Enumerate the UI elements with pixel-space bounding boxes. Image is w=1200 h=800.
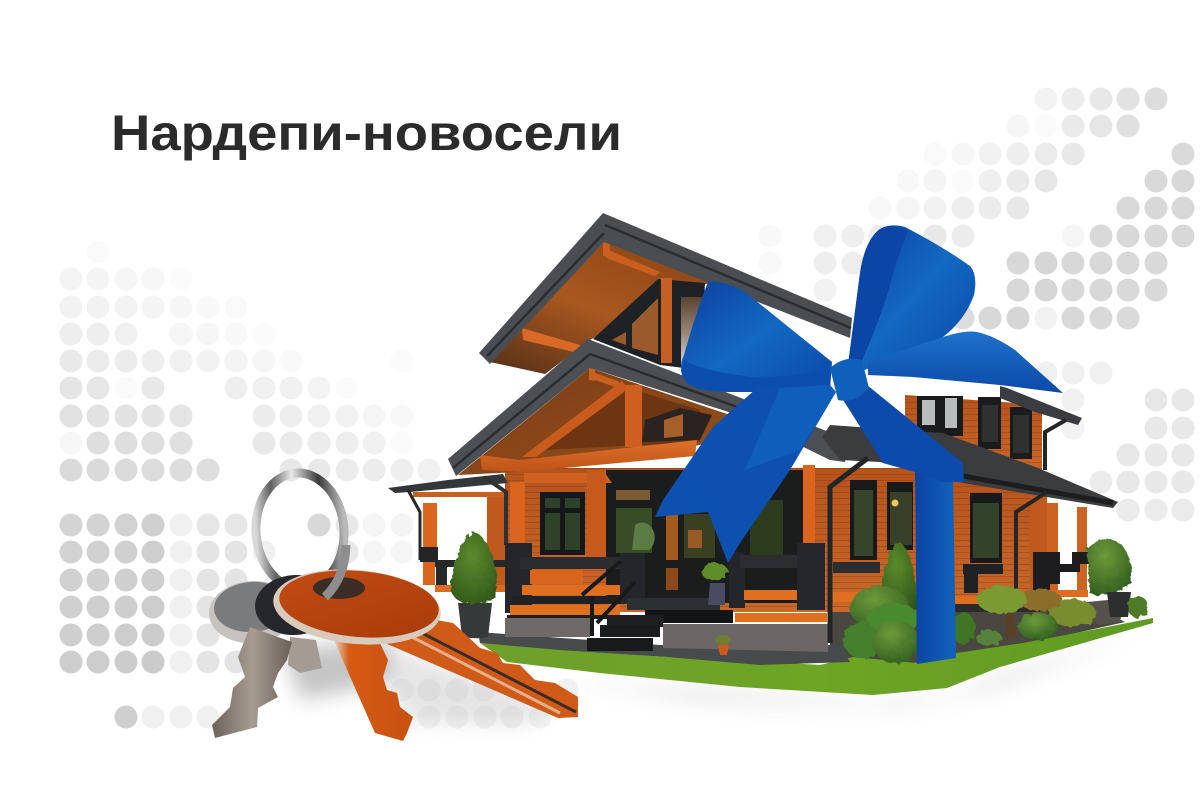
orange panel [530,570,583,584]
step 1 [587,638,653,651]
ring front arc [325,545,346,597]
left rail [435,560,506,585]
silver key blade [212,627,292,738]
window 1 [850,480,877,560]
granite foundation left [505,618,590,637]
left veranda post [423,503,437,547]
right rail strip [963,564,1003,593]
veranda post 2 [1077,507,1087,595]
black strip [512,596,622,604]
veranda back wall [1030,495,1047,600]
step 2 [600,625,660,637]
long key highlight [412,637,560,713]
shrub cluster [843,586,920,663]
glass [632,298,658,355]
small right shrub [1128,596,1148,618]
pier [505,543,532,613]
right window [970,493,1002,563]
black band [420,547,438,562]
veranda post 1 [1047,503,1058,600]
porch deck [627,598,720,610]
title: Нардепи-новосели [111,105,622,161]
pier [729,552,745,608]
orange key head [276,564,442,644]
dot pattern: upper left [60,240,440,482]
large right shrub [1087,539,1132,595]
front shrub [872,621,920,663]
wall base strip [950,604,1040,612]
long key groove [420,632,576,712]
black rail caps [1033,552,1092,592]
lower right tail [840,385,964,482]
shrub [451,532,498,604]
vase [708,583,725,605]
back key blade [288,637,322,673]
left window [540,492,585,555]
granite foundation right [663,624,828,652]
lower gable soffit [458,368,745,475]
plant [715,635,731,645]
orange key head rim [270,563,444,651]
downpipe left [484,477,506,545]
key hole [313,577,365,599]
orange panel [744,590,797,600]
base strip [507,615,620,619]
white opening at left veranda [437,503,505,550]
black planter right [1107,592,1131,617]
window c [1010,407,1032,459]
left loop underside [682,360,830,392]
ochre shrub [1048,599,1096,627]
post [803,465,815,543]
foliage [702,563,728,581]
siding column [661,278,672,363]
window a [917,396,963,436]
left pier and rail [505,543,626,619]
key ring [252,470,348,592]
right veranda section [1030,495,1092,600]
wall siding [505,468,1040,612]
orange key blade [333,637,413,741]
handrail [582,561,635,636]
upper gable soffit [490,242,712,374]
rafter tip [589,368,620,387]
upper rafter tip [603,241,660,276]
orange rail [522,585,620,595]
left tail [655,385,836,563]
upper right roof [1000,386,1082,425]
stairs [582,561,663,651]
bonsai canopy [977,586,1027,614]
rail [520,557,626,569]
step 3 [607,615,663,627]
left veranda wall piece [487,495,505,590]
potted flowers [702,563,728,605]
conifer behind ribbon [879,542,917,610]
lower roof edge lines [453,354,740,468]
left post lower [423,562,435,585]
garden ground [830,605,1125,665]
keys [207,470,578,741]
window 2 [887,482,913,550]
large shrub [850,586,910,630]
dark frame [593,279,705,370]
left tail highlight [745,385,836,470]
beam [480,440,697,472]
low shrub [976,630,1002,646]
right rail [729,465,827,622]
brace [522,381,628,457]
lawn shadow [560,632,1140,708]
upper roof edge lines [487,225,851,356]
post [625,385,642,447]
lower gable inner wall [545,388,700,450]
left veranda beam [413,492,505,497]
downpipe centre [830,458,868,643]
dot pattern: upper right [758,88,1200,330]
upper wall siding [905,395,1042,475]
ribbon bow [655,225,1063,664]
window right [681,297,705,365]
main ground floor wall [505,468,1040,612]
mid shrub [867,603,919,633]
gable window [593,278,705,370]
left veranda roof [388,474,508,493]
lower roof [448,339,850,476]
back key face [212,579,292,635]
downpipe right [1016,492,1047,590]
lower left shrub [843,621,885,659]
key shadow near [285,640,400,700]
paved path [478,632,850,665]
top loop [848,225,975,372]
shrub right of ribbon [951,612,975,644]
glass panes [616,508,652,553]
house [388,213,1148,665]
knot [830,359,869,401]
pot [458,603,492,638]
bonsai trunk [1006,612,1016,637]
back key head [207,578,297,646]
upper soffit beam [522,328,580,353]
left loop [681,282,832,392]
dot pattern: lower left [60,514,578,728]
glazing door area [606,470,810,603]
orange long key [382,617,578,718]
orange skirt [735,613,827,622]
small gable window [642,408,712,442]
upper right windows [917,396,1032,459]
veranda opening [1057,513,1077,563]
orange base [1040,590,1088,597]
beam under [524,473,612,483]
upper roof [479,213,852,364]
small terracotta pot [715,635,731,655]
orange skirt [510,605,620,615]
downpipe veranda [408,490,420,560]
planter left [451,532,498,638]
pot [718,645,729,655]
post column right of window [587,470,606,560]
vertical ribbon [915,472,956,664]
rail [740,555,797,568]
round shrub [1018,612,1058,640]
centre pier [620,553,645,604]
main right roof [822,425,1118,508]
garden shrubs [951,586,1096,646]
amber shrub [1018,589,1062,611]
lamp [892,500,898,506]
right rocks [1075,600,1122,625]
roof fascia [963,476,1113,503]
dark key head [253,572,337,638]
lawn [480,618,1153,695]
left orange skirt [435,585,506,592]
window b [978,397,1001,449]
right tail [868,332,1063,393]
top loop inner shade [848,226,908,365]
upper storey wall right [905,395,1042,475]
wall rail strip [833,562,880,573]
main post left [510,482,525,543]
panes [545,498,580,550]
pier [797,543,825,610]
frame [540,492,585,555]
gutter upper [1045,420,1066,470]
key shadow far [400,650,560,725]
centre windows [850,480,913,560]
dot pattern: lower right [1034,362,1194,522]
